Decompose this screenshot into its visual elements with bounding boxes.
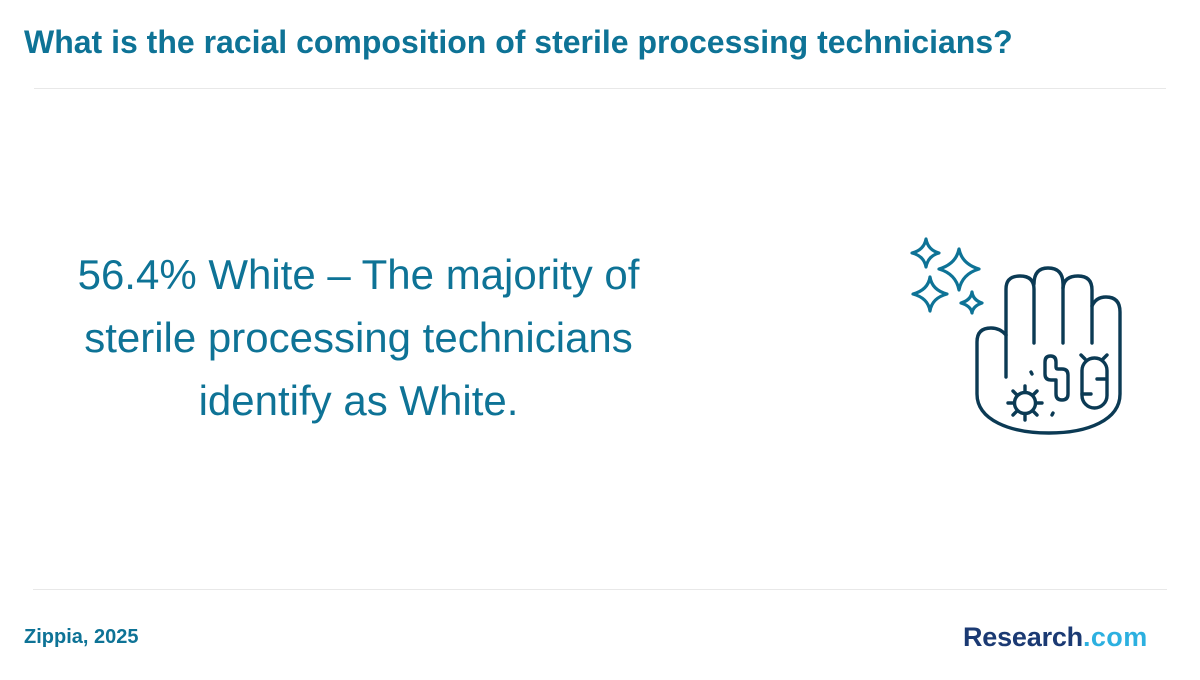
source: Zippia, 2025	[24, 626, 138, 648]
germs	[1008, 355, 1107, 420]
main statement: 56.4% White – The majority of	[78, 251, 639, 298]
title: What is the racial composition of sterile processing technicians?	[24, 24, 1013, 60]
icon: clean hand with sparkles and germs	[910, 237, 1122, 435]
main statement: identify as White.	[199, 377, 518, 424]
sparkles	[912, 239, 982, 313]
hand outline	[977, 268, 1120, 433]
main statement	[78, 251, 640, 424]
main statement: sterile processing technicians	[84, 314, 633, 361]
logo: Research.com	[963, 622, 1148, 652]
